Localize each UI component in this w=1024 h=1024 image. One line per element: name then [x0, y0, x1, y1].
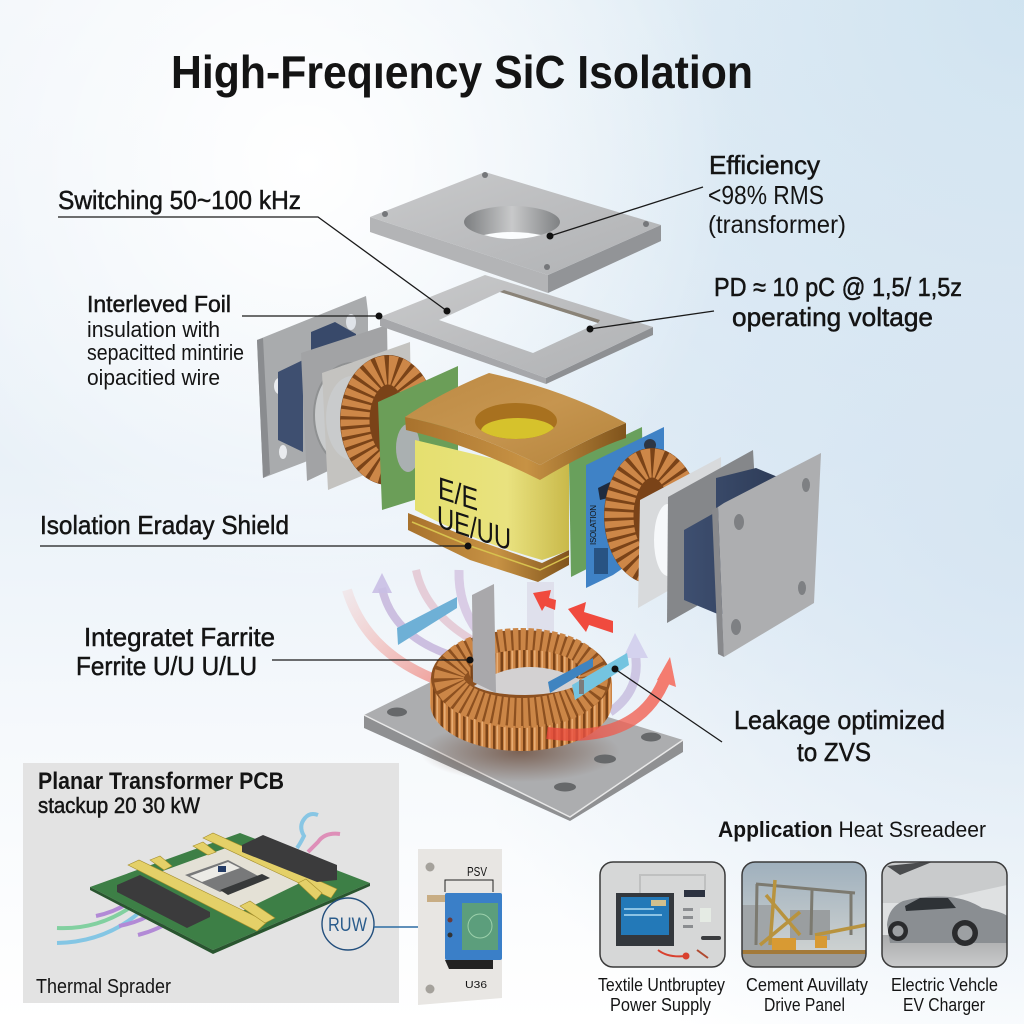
applications heading: Application Heat Ssreadeer [718, 817, 986, 842]
panel heading: stackup 20 30 kW [38, 793, 200, 818]
central module [160, 848, 302, 912]
callout: switching frequency: Switching 50~100 kHz [58, 185, 301, 215]
right grey plate [667, 450, 760, 623]
callout: integrated ferrite: Integratet Farrite [84, 622, 275, 652]
upper brass flange [405, 373, 626, 480]
tile border UPS [600, 862, 725, 967]
left green plate [378, 366, 458, 510]
light blue bar right [572, 653, 629, 700]
yellow bus bars [128, 833, 337, 931]
base plate [364, 670, 683, 821]
title: High-Freqıency SiC Isolation [171, 46, 753, 98]
right blue PCB [586, 427, 664, 588]
wires [57, 814, 340, 943]
right navy block [684, 468, 790, 615]
callout: isolation shield: Isolation Eraday Shield [40, 510, 289, 540]
tile border cement [742, 862, 866, 967]
left navy block [278, 322, 356, 452]
callout: integrated ferrite: Ferrite U/U U/LU [76, 651, 257, 681]
right green plate [569, 427, 644, 577]
core label: UE/UU [437, 498, 511, 558]
application captions: Electric Vehcle [891, 975, 998, 995]
callout: efficiency: Efficiency [709, 150, 820, 180]
callout: leakage optimized: Leakage optimized [734, 705, 945, 735]
magnetic flux band [527, 582, 554, 634]
left flux arcs [347, 570, 478, 678]
connector line to detail [374, 924, 424, 930]
application captions: Drive Panel [764, 995, 845, 1015]
panel: cement plant photo [742, 862, 866, 967]
application captions: Textile Untbruptey [598, 975, 725, 995]
window frame plate [380, 275, 653, 384]
right purple flux arrow [610, 633, 648, 712]
thermal label: Thermal Sprader [36, 976, 171, 998]
silver insulation strip [472, 584, 496, 693]
callout: interleaved foil: insulation with [87, 317, 220, 342]
central E/E core [405, 373, 626, 582]
right copper coil [604, 448, 700, 584]
left grey plate [301, 325, 389, 481]
callout: interleaved foil: Interleved Foil [87, 291, 231, 317]
green circuit board [90, 833, 370, 950]
callout: interleaved foil: sepacitted mintirie [87, 340, 244, 365]
top metal plate [370, 172, 661, 293]
callout: partial discharge [586, 272, 962, 332]
blue bar left [397, 597, 457, 645]
right blue PCB: ISOLATION [589, 505, 598, 545]
callout: interleaved foil [87, 291, 382, 390]
dark blue bar [548, 658, 593, 693]
panel: UPS photo [600, 862, 725, 967]
callout: partial discharge: PD ≈ 10 pC @ 1,5/ 1,5z [714, 272, 962, 302]
tile border EV [882, 862, 1007, 967]
panel: electric vehicle photo [882, 862, 1007, 967]
left insulating ring [314, 363, 390, 467]
RUW callout circle: RUW [328, 915, 367, 936]
callout: leakage optimized [612, 666, 945, 767]
left speckled plate [322, 342, 412, 490]
panel: planar transformer PCB [23, 763, 399, 1003]
callout: leakage optimized: to ZVS [797, 737, 871, 767]
large red arrow [568, 602, 613, 633]
application captions: Cement Auvillaty [746, 975, 868, 995]
right transformer assembly back layers [569, 427, 821, 657]
callout: efficiency: <98% RMS [708, 180, 824, 210]
callout: interleaved foil: oipacitied wire [87, 365, 220, 390]
RUW callout circle [322, 898, 374, 950]
core label: E/E [438, 470, 478, 518]
core label [437, 469, 511, 558]
toroid core [430, 630, 612, 751]
application captions: Power Supply [610, 995, 711, 1015]
base plate with toroid [347, 570, 683, 821]
callout: efficiency: (transformer) [708, 211, 846, 239]
callout: integrated ferrite [76, 622, 474, 681]
PSV label: PSV [467, 864, 487, 879]
left copper coil [340, 355, 436, 485]
callout: switching frequency [58, 185, 450, 314]
red curved arrow [547, 657, 676, 735]
left back plate [257, 296, 368, 478]
yellow bobbin [415, 440, 569, 560]
panel: PSV detail module [418, 849, 502, 1005]
left transformer assembly [257, 296, 458, 510]
callout: efficiency [546, 150, 846, 240]
lower brass flange [408, 513, 569, 582]
black connector rear [242, 835, 337, 882]
callout: partial discharge: operating voltage [732, 302, 933, 332]
right front plate [712, 453, 821, 657]
panel heading: Planar Transformer PCB [38, 768, 284, 795]
black connector front [117, 875, 210, 928]
part code: U36 [465, 980, 488, 991]
right white plate [638, 457, 722, 608]
callout: isolation shield [40, 510, 472, 550]
panel heading [38, 768, 284, 818]
application captions [598, 975, 998, 1015]
small red arrow [533, 590, 556, 611]
application captions: EV Charger [903, 995, 985, 1015]
